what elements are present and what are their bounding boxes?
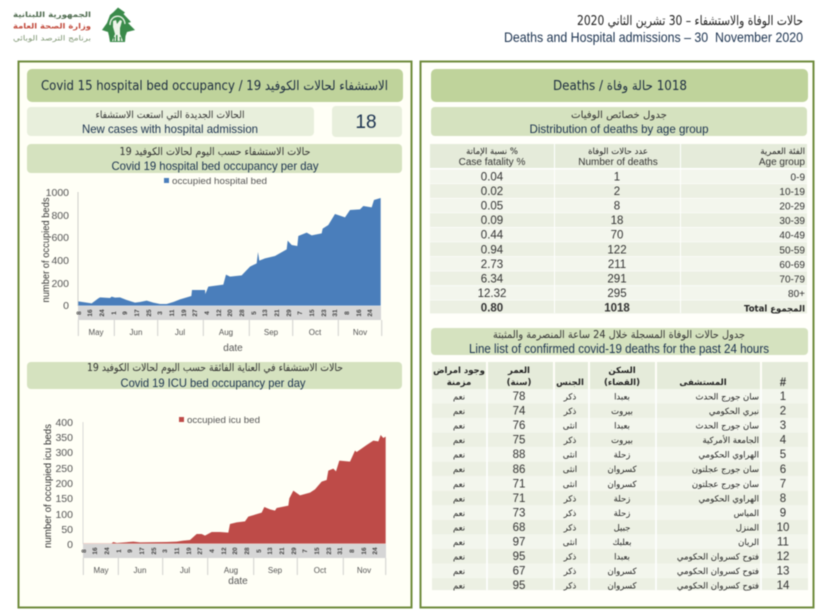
date tick band bbox=[81, 544, 386, 558]
table rows: انثى bbox=[563, 538, 577, 548]
table rows: ذكر bbox=[563, 509, 576, 519]
table rows: سان جورج الحدث bbox=[696, 422, 759, 432]
table rows: المياس bbox=[734, 509, 759, 519]
table rows: 1018 bbox=[604, 302, 630, 314]
icon: cedar tree bbox=[102, 8, 135, 42]
table header: (القضاء) bbox=[604, 378, 640, 388]
table rows: 50-59 bbox=[779, 245, 805, 256]
date tick band: 21 bbox=[274, 309, 281, 317]
date tick band: 27 bbox=[197, 547, 204, 555]
new cases label: الحالات الجديدة التي استعت الاستشفاء bbox=[96, 110, 244, 121]
table rows: 95 bbox=[513, 551, 525, 563]
date tick band: 7 bbox=[297, 311, 304, 315]
table header: # bbox=[780, 377, 787, 389]
table rows: 30-39 bbox=[779, 216, 805, 227]
new cases value: 18 bbox=[355, 112, 377, 133]
table rows: 2.73 bbox=[481, 259, 503, 271]
date tick band: 20 bbox=[232, 547, 239, 555]
date tick band bbox=[76, 306, 381, 320]
table rows: 211 bbox=[608, 259, 626, 271]
table rows: 8 bbox=[614, 201, 620, 213]
table rows: 68 bbox=[513, 522, 525, 534]
date tick band: 15 bbox=[314, 547, 321, 555]
table rows: 1 bbox=[614, 172, 620, 184]
y axis labels: 400 bbox=[51, 255, 69, 267]
date tick band: 29 bbox=[291, 547, 298, 555]
y axis labels: 150 bbox=[55, 493, 73, 505]
table rows: سان جورج عجلتون bbox=[692, 465, 759, 475]
table header: Number of deaths bbox=[578, 157, 658, 168]
table rows: نعم bbox=[453, 582, 465, 592]
date tick band: 23 bbox=[326, 547, 333, 555]
table rows: فتوح كسروان الحكومي bbox=[677, 552, 759, 562]
line list heading: Line list of confirmed covid-19 deaths for the past 24 hours bbox=[469, 342, 769, 356]
area chart: occupied ICU beds bbox=[43, 415, 386, 587]
logo text: برنامج الترصد الوبائي bbox=[13, 34, 91, 42]
table rows: 60-69 bbox=[779, 260, 805, 271]
date tick band: 3 bbox=[157, 311, 164, 315]
date tick band: 27 bbox=[192, 309, 199, 317]
table rows: سان جورج عجلتون bbox=[692, 480, 759, 490]
date tick band: 11 bbox=[174, 547, 181, 554]
table header: العمر bbox=[507, 366, 530, 376]
table rows: كسروان bbox=[607, 465, 637, 475]
line list heading bbox=[431, 328, 808, 356]
area series bbox=[83, 435, 386, 544]
table rows: نعم bbox=[453, 480, 465, 490]
table rows: الهراوي الحكومي bbox=[698, 494, 759, 504]
date tick band: 23 bbox=[321, 309, 328, 317]
y axis labels: 200 bbox=[51, 278, 69, 290]
table rows: انثى bbox=[563, 465, 577, 475]
date tick band: 19 bbox=[186, 547, 193, 555]
date tick band: 24 bbox=[367, 309, 374, 317]
table header: Case fatality % bbox=[459, 157, 525, 168]
table rows: 74 bbox=[513, 406, 526, 418]
line list heading: جدول حالات الوفاة المسجلة خلال 24 ساعة المنصرمة والمثبتة bbox=[493, 329, 745, 341]
table rows: 75 bbox=[513, 435, 525, 447]
y axis labels: 300 bbox=[55, 447, 73, 459]
area chart: occupied hospital beds bbox=[41, 176, 382, 354]
table rows: نعم bbox=[453, 494, 465, 504]
panel heading bbox=[27, 69, 403, 102]
month labels: Jul bbox=[175, 328, 185, 337]
table rows: كسروان bbox=[607, 480, 637, 490]
table rows: بيروت bbox=[611, 436, 633, 446]
table rows: 12 bbox=[777, 551, 789, 563]
area series bbox=[78, 198, 381, 306]
table header bbox=[433, 366, 787, 389]
table rows: سان جورج الحدث bbox=[696, 392, 759, 402]
table rows: ذكر bbox=[563, 392, 576, 402]
date tick band: 1 bbox=[111, 311, 118, 315]
date tick band: 19 bbox=[181, 309, 188, 317]
month labels: May bbox=[88, 328, 104, 337]
date tick band: 28 bbox=[239, 309, 246, 317]
date tick band: 25 bbox=[151, 547, 158, 555]
table rows: بعلبك bbox=[612, 538, 632, 548]
month labels: Oct bbox=[314, 566, 327, 575]
table rows: 0.94 bbox=[481, 244, 504, 256]
chart heading: hospital beds bbox=[27, 144, 402, 173]
chart heading: hospital beds: Covid 19 hospital bed occupancy per day bbox=[112, 159, 318, 173]
date tick band: 12 bbox=[221, 547, 228, 555]
table rows: بعبدا bbox=[614, 552, 630, 562]
date tick band: 20 bbox=[227, 309, 234, 317]
title bbox=[504, 14, 803, 45]
chart heading: ICU beds: Covid 19 ICU bed occupancy per day bbox=[120, 376, 306, 390]
table rows: بعبدا bbox=[614, 392, 630, 402]
new cases label bbox=[27, 107, 314, 136]
date tick band: 24 bbox=[104, 547, 111, 555]
table rows: 2 bbox=[780, 406, 786, 418]
month labels: Oct bbox=[309, 328, 322, 337]
age table heading bbox=[431, 107, 807, 136]
x axis title: date bbox=[228, 576, 248, 587]
table rows: ذكر bbox=[563, 436, 576, 446]
month labels: Nov bbox=[357, 566, 371, 575]
table rows: 0.80 bbox=[481, 302, 503, 314]
table rows: 67 bbox=[513, 566, 525, 578]
table rows: الهراوي الحكومي bbox=[698, 451, 759, 461]
table rows: 3 bbox=[780, 420, 786, 432]
axis title: number of occupied beds bbox=[41, 198, 52, 302]
table rows: 291 bbox=[607, 273, 627, 285]
table rows: جبيل bbox=[614, 523, 630, 533]
table rows: ذكر bbox=[563, 582, 576, 592]
table rows: ذكر bbox=[563, 494, 576, 504]
date tick band: 16 bbox=[87, 309, 94, 317]
table: line list of deaths bbox=[432, 362, 808, 592]
table rows: 6.34 bbox=[481, 273, 504, 285]
table rows: نعم bbox=[453, 451, 465, 461]
y axis labels: 600 bbox=[51, 232, 69, 244]
age table heading: Distribution of deaths by age group bbox=[530, 122, 709, 136]
date tick band: 25 bbox=[146, 309, 153, 317]
table rows: نعم bbox=[453, 523, 465, 533]
table rows: المجموع Total bbox=[744, 304, 805, 314]
chart heading: ICU beds: حالات الاستشفاء في العناية الفائقة حسب اليوم لحالات الكوفيد 19 bbox=[87, 362, 343, 374]
legend: occupied hospital bed bbox=[172, 176, 267, 187]
table header: السكن bbox=[608, 366, 636, 376]
table rows bbox=[478, 172, 805, 314]
table header: الجنس bbox=[556, 378, 584, 388]
date tick band: 11 bbox=[169, 309, 176, 316]
date tick band: 29 bbox=[286, 309, 293, 317]
date tick band: 16 bbox=[92, 547, 99, 555]
table rows: 0.04 bbox=[481, 172, 504, 184]
table rows: 18 bbox=[611, 215, 623, 227]
date tick band: 4 bbox=[204, 311, 211, 315]
table rows: 86 bbox=[513, 464, 525, 476]
table rows: كسروان bbox=[607, 567, 637, 577]
table rows: بعبدا bbox=[614, 422, 630, 432]
table rows: 20-29 bbox=[779, 202, 805, 213]
table header: Age group bbox=[759, 157, 805, 168]
table rows bbox=[453, 391, 790, 592]
table rows: فتوح كسروان الحكومي bbox=[677, 582, 759, 592]
table rows: 7 bbox=[780, 478, 786, 490]
logo text: وزارة الصحة العامة bbox=[13, 22, 91, 30]
table rows: 11 bbox=[777, 536, 789, 548]
date tick band: 31 bbox=[337, 547, 344, 555]
date tick band: 24 bbox=[372, 547, 379, 555]
table rows: 14 bbox=[777, 580, 790, 592]
table rows: انثى bbox=[563, 451, 577, 461]
new cases value bbox=[332, 106, 402, 137]
month labels: May bbox=[93, 566, 109, 575]
table rows: 40-49 bbox=[779, 231, 805, 242]
table rows: زحلة bbox=[614, 509, 630, 519]
table rows: الجامعة الأمركية bbox=[702, 435, 759, 446]
chart heading: ICU beds bbox=[27, 362, 402, 390]
table rows: 97 bbox=[513, 536, 525, 548]
table rows: 78 bbox=[513, 391, 525, 403]
table rows: نعم bbox=[453, 465, 465, 475]
table rows: 71 bbox=[513, 478, 525, 490]
y axis labels: 100 bbox=[55, 509, 73, 521]
table: deaths by age group bbox=[430, 144, 807, 314]
table rows: ذكر bbox=[563, 407, 576, 417]
logo text: الجمهورية اللبنانية bbox=[13, 10, 91, 19]
table rows: 9 bbox=[780, 507, 786, 519]
table rows: 13 bbox=[777, 566, 789, 578]
table rows: نعم bbox=[453, 509, 465, 519]
date tick band: 8 bbox=[344, 311, 351, 315]
table rows: زحلة bbox=[614, 494, 630, 504]
table rows: 4 bbox=[780, 435, 787, 447]
y axis labels bbox=[46, 187, 69, 312]
y axis labels: 0 bbox=[63, 300, 69, 312]
table rows: ذكر bbox=[563, 523, 576, 533]
logo text bbox=[13, 10, 91, 42]
table header: (سنة) bbox=[507, 378, 531, 388]
date tick band: 28 bbox=[244, 547, 251, 555]
table rows: 76 bbox=[513, 420, 525, 432]
table rows: 5 bbox=[780, 449, 786, 461]
y axis labels: 1000 bbox=[46, 187, 69, 199]
date tick band: 9 bbox=[127, 549, 134, 553]
table rows: 1 bbox=[780, 391, 786, 403]
date tick band: 16 bbox=[356, 309, 363, 317]
date tick band: 9 bbox=[122, 311, 129, 315]
date tick band: 3 bbox=[162, 549, 169, 553]
panel heading: الاستشفاء لحالات الكوفيد 19 / Covid 15 hospital bed occupancy bbox=[41, 79, 388, 94]
month labels: Aug bbox=[224, 566, 238, 575]
date tick band: 24 bbox=[99, 309, 106, 317]
legend: occupied icu bed bbox=[187, 415, 260, 426]
table rows: 70-79 bbox=[779, 274, 805, 285]
table rows: 12.32 bbox=[478, 288, 506, 300]
date tick band: 12 bbox=[216, 309, 223, 317]
month labels: Nov bbox=[353, 328, 367, 337]
chart heading: hospital beds: حالات الاستشفاء حسب اليوم لحالات الكوفيد 19 bbox=[120, 146, 310, 158]
y axis labels: 200 bbox=[55, 478, 73, 490]
table header: مزمنة bbox=[447, 378, 471, 388]
month labels: Aug bbox=[219, 328, 233, 337]
table rows: 6 bbox=[780, 464, 786, 476]
panel heading: 1018 حالة وفاة / Deaths bbox=[553, 79, 687, 94]
table rows: زحلة bbox=[614, 451, 630, 461]
table rows: الريان bbox=[738, 538, 759, 548]
table rows: نعم bbox=[453, 552, 465, 562]
panel: deaths bbox=[420, 62, 814, 608]
table rows: 2 bbox=[614, 186, 620, 198]
table rows: 0-9 bbox=[791, 172, 805, 184]
date tick band: 21 bbox=[279, 547, 286, 555]
table rows: 73 bbox=[513, 507, 525, 519]
axis title: number of occupied icu beds bbox=[43, 424, 54, 548]
table rows: 0.05 bbox=[481, 201, 503, 213]
table rows: ذكر bbox=[563, 552, 576, 562]
table rows: 122 bbox=[607, 244, 627, 256]
table rows: المنزل bbox=[736, 523, 759, 533]
date tick band: 17 bbox=[134, 309, 141, 317]
table rows: نعم bbox=[453, 407, 465, 417]
table rows: 70 bbox=[611, 230, 623, 242]
table rows: 295 bbox=[607, 288, 627, 300]
y axis labels bbox=[55, 417, 73, 551]
y axis labels: 400 bbox=[55, 417, 73, 429]
month labels bbox=[83, 558, 386, 575]
date tick band: 8 bbox=[81, 549, 88, 553]
date tick band: 16 bbox=[361, 547, 368, 555]
table header: عدد حالات الوفاة bbox=[588, 147, 648, 157]
y axis labels: 800 bbox=[51, 210, 69, 222]
table header: وجود امراض bbox=[433, 366, 485, 376]
month labels: Jun bbox=[130, 328, 142, 337]
table rows: 0.09 bbox=[481, 215, 503, 227]
date tick band: 31 bbox=[332, 309, 339, 317]
date tick band: 8 bbox=[76, 311, 83, 315]
table rows: 10-19 bbox=[779, 187, 805, 198]
month labels bbox=[78, 320, 382, 337]
table rows: 88 bbox=[513, 449, 525, 461]
date tick band: 5 bbox=[256, 549, 263, 553]
table rows: نعم bbox=[453, 567, 465, 577]
table rows: نعم bbox=[453, 538, 465, 548]
age table heading: جدول خصائص الوفيات bbox=[571, 110, 667, 121]
table header: المستشفى bbox=[679, 378, 727, 388]
table rows: نبري الحكومي bbox=[709, 407, 759, 417]
date tick band: 17 bbox=[139, 547, 146, 555]
month labels: Sep bbox=[268, 566, 283, 575]
panel: hospital bed occupancy bbox=[18, 62, 412, 608]
date tick band: 7 bbox=[302, 549, 309, 553]
table rows: 80+ bbox=[788, 289, 805, 300]
date tick band: 5 bbox=[251, 311, 258, 315]
table rows: فتوح كسروان الحكومي bbox=[677, 567, 759, 577]
date tick band: 13 bbox=[267, 547, 274, 555]
y axis labels: 0 bbox=[67, 539, 73, 551]
table header bbox=[459, 147, 805, 168]
table rows: كسروان bbox=[607, 582, 637, 592]
table rows: بيروت bbox=[611, 407, 633, 417]
table rows: نعم bbox=[453, 392, 465, 402]
y axis labels: 50 bbox=[61, 524, 73, 536]
logo: Ministry of Public Health bbox=[13, 8, 135, 42]
month labels: Jul bbox=[180, 566, 190, 575]
date tick band: 4 bbox=[209, 549, 216, 553]
new cases label: New cases with hospital admission bbox=[82, 122, 258, 136]
table rows: 71 bbox=[513, 493, 525, 505]
table rows: نعم bbox=[453, 436, 465, 446]
table header: نسبة الإماتة % bbox=[466, 147, 518, 157]
y axis labels: 350 bbox=[55, 432, 73, 444]
table rows: نعم bbox=[453, 422, 465, 432]
table rows: 95 bbox=[513, 580, 525, 592]
date tick band: 8 bbox=[349, 549, 356, 553]
x axis title: date bbox=[223, 343, 243, 354]
panel heading bbox=[431, 69, 808, 102]
table rows: انثى bbox=[563, 422, 577, 432]
table rows: 0.02 bbox=[481, 186, 503, 198]
table rows: 0.44 bbox=[481, 230, 504, 242]
month labels: Jun bbox=[134, 566, 146, 575]
y axis labels: 250 bbox=[55, 463, 73, 475]
month labels: Sep bbox=[264, 328, 279, 337]
date tick band: 13 bbox=[262, 309, 269, 317]
table rows: 10 bbox=[777, 522, 789, 534]
table rows: انثى bbox=[563, 480, 577, 490]
date tick band: 15 bbox=[309, 309, 316, 317]
table rows: 8 bbox=[780, 493, 786, 505]
table rows: ذكر bbox=[563, 567, 576, 577]
date tick band: 1 bbox=[116, 549, 123, 553]
table header: الفئة العمرية bbox=[760, 147, 805, 157]
